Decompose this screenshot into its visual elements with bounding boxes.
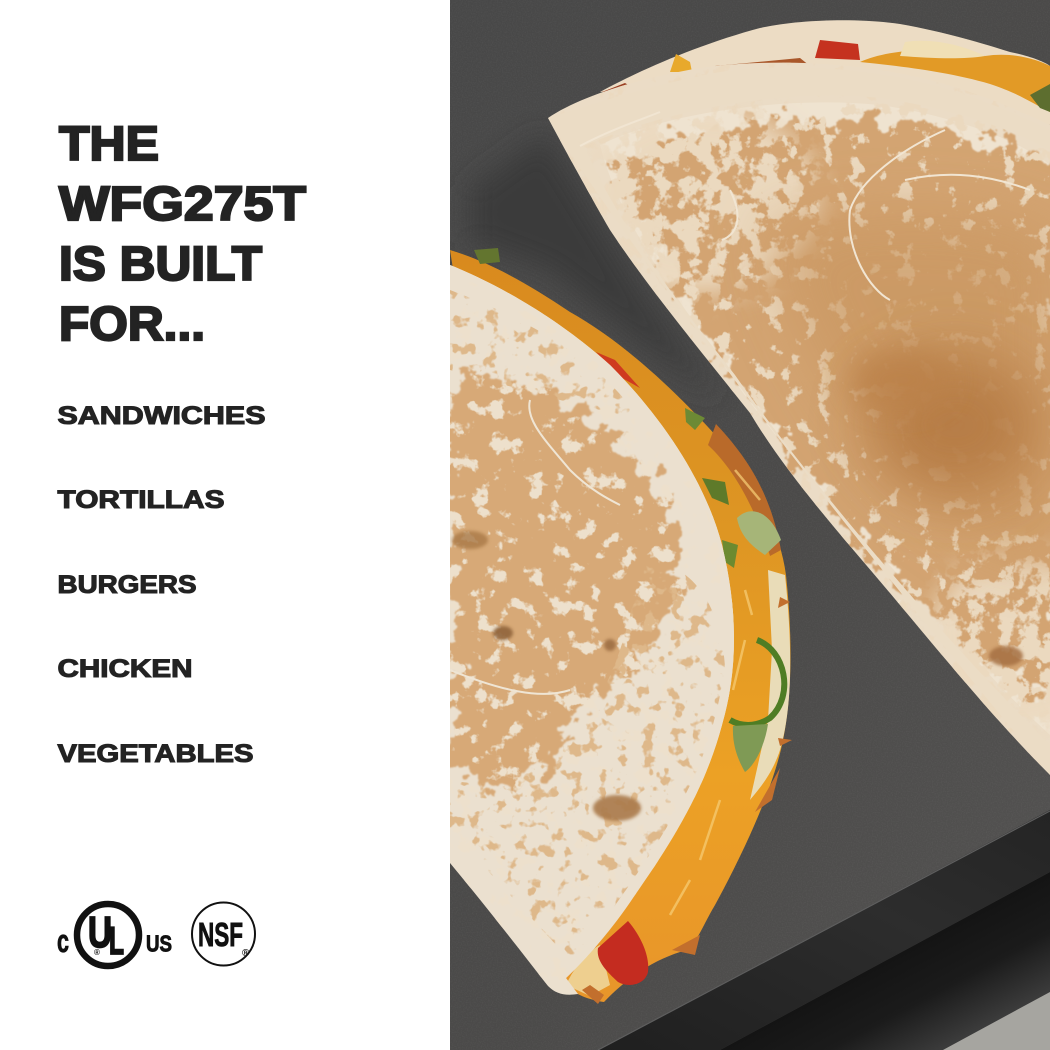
orange crisp cheese edge	[708, 424, 781, 556]
front tortilla	[548, 63, 1050, 775]
green pepper pieces	[474, 248, 784, 772]
cheese in back layer	[602, 40, 1050, 112]
food list: CHICKEN	[58, 655, 192, 683]
red pepper	[598, 921, 648, 985]
icon: NSF certification mark: ®	[242, 948, 250, 959]
icon: NSF certification mark: NSF	[198, 916, 243, 953]
food list	[58, 402, 266, 768]
quesadilla top right	[548, 20, 1050, 780]
icon: cULus certification mark: L	[109, 920, 124, 963]
griddle top surface	[450, 0, 1050, 1050]
title: The WFG275T is built for: THE	[59, 118, 159, 171]
front tortilla	[450, 265, 734, 995]
food list: TORTILLAS	[58, 486, 224, 514]
highlights	[670, 470, 760, 915]
title: The WFG275T is built for: FOR...	[59, 298, 205, 351]
pale melted cheese and tortilla edge	[750, 570, 790, 800]
griddle front edge	[598, 810, 1050, 1050]
icon: cULus certification mark: US	[146, 930, 172, 956]
dark gap under griddle	[720, 872, 1050, 1050]
toasted surface	[548, 60, 1050, 780]
photo: quesadillas on griddle	[450, 0, 1050, 1050]
food list: VEGETABLES	[58, 740, 254, 768]
icon: cULus certification mark: ®	[94, 948, 100, 957]
quesadilla bottom left	[450, 248, 792, 1004]
title: The WFG275T is built for	[59, 118, 306, 351]
title: The WFG275T is built for: IS BUILT	[59, 238, 262, 291]
icon: cULus certification mark: c	[57, 923, 69, 959]
title: The WFG275T is built for: WFG275T	[59, 178, 306, 231]
icon: NSF certification mark	[192, 902, 255, 966]
background: white text panel	[0, 0, 450, 1050]
toasted surface	[450, 260, 740, 980]
icon: cULus certification mark: U	[88, 908, 112, 957]
stainless base	[943, 992, 1050, 1050]
back tortilla layer	[600, 20, 1050, 125]
crisp bits	[582, 597, 792, 1004]
cheese and fillings	[450, 248, 792, 1004]
food list: SANDWICHES	[58, 402, 266, 430]
icon: cULus certification mark	[57, 904, 172, 966]
food list: BURGERS	[58, 571, 196, 599]
